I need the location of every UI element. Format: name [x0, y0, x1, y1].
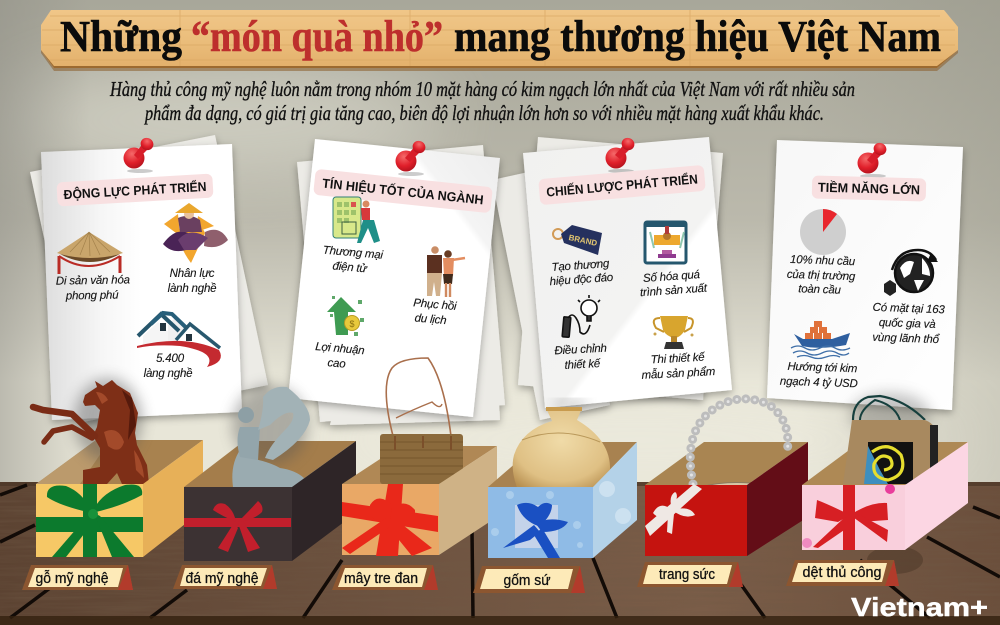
title banner	[41, 10, 958, 71]
text: thương mại điện tử: điện tử	[332, 260, 368, 275]
heading: CHIẾN LƯỢC PHÁT TRIỂN	[546, 171, 698, 200]
text: hướng tới kim ngạch: ngạch 4 tỷ USD	[780, 376, 858, 390]
bow: blue ribbon	[503, 503, 568, 558]
text: 5.400 làng nghề	[144, 353, 192, 380]
text: tạo thương hiệu độc đáo: Tạo thương	[551, 258, 610, 274]
text: lợi nhuận cao	[313, 341, 365, 372]
text: thi thiết kế mẫu sản phẩm	[640, 351, 716, 382]
text: có mặt tại 163	[871, 302, 946, 346]
text: điều chỉnh thiết kế: Điều chỉnh	[554, 343, 607, 357]
text: nhân lực lành nghề	[168, 268, 216, 295]
text: có mặt tại 163: quốc gia và	[879, 317, 936, 331]
text: thi thiết kế mẫu sản phẩm: mẫu sản phẩm	[641, 365, 716, 382]
icon: 3D printer	[645, 222, 686, 263]
label: trang sức: trang sức	[659, 566, 715, 583]
panel: động lực phát triển	[41, 136, 242, 420]
text: 10% nhu cầu: của thị trường	[787, 269, 856, 283]
text: có mặt tại 163: Có mặt tại 163	[872, 302, 946, 316]
text: phục hồi du lịch	[411, 297, 457, 328]
icon: couple travellers	[427, 246, 465, 297]
text: 5.400 làng nghề: 5.400	[156, 353, 185, 365]
heading	[812, 176, 926, 201]
icon: globe with arrow	[884, 250, 938, 296]
text: nhân lực lành nghề: Nhân lực	[170, 268, 215, 280]
icon: houses	[137, 313, 221, 367]
label: mây tre đan	[332, 565, 438, 590]
label: dệt thủ công	[786, 560, 899, 586]
label: gỗ mỹ nghệ	[22, 565, 133, 590]
bow: white ribbon	[645, 484, 702, 536]
text: 10% nhu cầu	[786, 254, 857, 297]
icon: e-commerce shopper	[333, 197, 380, 243]
label: dệt thủ công: dệt thủ công	[802, 564, 882, 581]
text: 10% nhu cầu: toàn cầu	[798, 283, 842, 297]
background: wall	[0, 0, 1000, 490]
title text: Những	[60, 12, 182, 61]
text: số hóa quá trình sản xuất	[639, 269, 708, 299]
label: trang sức	[637, 562, 743, 587]
back sheets of paper	[30, 135, 723, 425]
pearl bracelet	[690, 399, 788, 487]
text: tạo thương hiệu độc đáo: hiệu độc đáo	[549, 272, 614, 288]
heading: TIỀM NĂNG LỚN	[818, 180, 920, 197]
gift box: gốm sứ	[488, 401, 637, 558]
pie chart: 10%	[800, 209, 846, 255]
woven fabric bag	[843, 393, 938, 484]
icon: brand tag: BRAND	[568, 233, 598, 248]
bow: orange-red ribbon	[342, 484, 438, 556]
text: thương mại điện tử: Thương mại	[322, 245, 384, 262]
icon: profit arrow with coin	[327, 296, 364, 336]
text: tạo thương hiệu độc đáo	[548, 258, 614, 288]
panel: chiến lược phát triển	[523, 136, 732, 408]
ceramic vase	[513, 401, 610, 490]
title text	[60, 12, 941, 61]
text: có mặt tại 163: vùng lãnh thổ	[872, 332, 940, 346]
heading: ĐỘNG LỰC PHÁT TRIỂN	[63, 179, 207, 202]
text: lợi nhuận cao: cao	[327, 357, 347, 371]
label: mây tre đan: mây tre đan	[344, 570, 418, 587]
text: di sản văn hóa	[56, 274, 130, 303]
label: đá mỹ nghệ	[173, 565, 277, 589]
panel: tín hiệu tốt của ngành	[288, 139, 500, 417]
text: điều chỉnh thiết kế	[554, 343, 608, 372]
icon: brand tag	[553, 225, 602, 255]
bow: green ribbon	[36, 484, 143, 557]
icon: craftswoman with fans	[163, 203, 228, 263]
label: gốm sứ	[473, 566, 585, 593]
bow: red ribbon	[184, 501, 291, 552]
icon: red pin	[124, 136, 156, 173]
title text: “món quà nhỏ”	[191, 12, 443, 61]
text: nhân lực lành nghề: lành nghề	[168, 283, 216, 295]
text: phục hồi du lịch: du lịch	[414, 312, 447, 327]
icon: cargo ship	[791, 321, 850, 358]
icon: pencil and lightbulb	[562, 295, 600, 337]
label: đá mỹ nghệ: đá mỹ nghệ	[186, 570, 258, 587]
gift box: mây tre đan	[342, 358, 497, 556]
icon: red pin	[606, 136, 637, 173]
text: thương mại điện tử	[321, 245, 384, 277]
text: số hóa quá trình sản xuất: trình sản xuất	[640, 283, 708, 299]
intro paragraph	[109, 77, 855, 125]
woven handbag	[380, 358, 463, 484]
icon: red pin	[396, 139, 428, 176]
label: gỗ mỹ nghệ: gỗ mỹ nghệ	[36, 570, 108, 587]
bow: red ribbon	[813, 485, 888, 550]
icon: trophy	[654, 316, 694, 349]
gift box: gỗ mỹ nghệ	[33, 378, 203, 557]
gift box: dệt thủ công	[802, 393, 968, 550]
label: gốm sứ: gốm sứ	[504, 572, 550, 589]
text: di sản văn hóa: Di sản văn hóa	[56, 274, 130, 288]
text: phục hồi du lịch: Phục hồi	[413, 297, 457, 313]
icon: profit arrow with coin: $	[349, 319, 355, 329]
text: hướng tới kim ngạch	[780, 361, 858, 390]
text: 5.400 làng nghề: làng nghề	[144, 368, 192, 380]
text: số hóa quá trình sản xuất: Số hóa quá	[643, 269, 701, 285]
gift box: trang sức	[645, 399, 808, 556]
intro paragraph: phẩm đa dạng, có giá trị gia tăng cao, biên độ lợi nhuận lớn hơn so với nhiều mặt hàng xuất khẩu khác.	[143, 101, 824, 125]
background: wooden table	[0, 482, 1000, 625]
icon: red pin	[858, 141, 889, 178]
title text: mang thương hiệu Việt Nam	[454, 12, 941, 61]
icon: conical hat	[57, 232, 123, 274]
text: hướng tới kim ngạch: Hướng tới kim	[787, 361, 858, 375]
panel: tiềm năng lớn	[767, 140, 963, 410]
heading	[56, 174, 214, 206]
heading	[538, 165, 706, 205]
logo: Vietnam+: Vietnam+	[851, 592, 988, 622]
text: lợi nhuận cao: Lợi nhuận	[315, 341, 365, 357]
heading: TÍN HIỆU TỐT CỦA NGÀNH	[322, 176, 484, 207]
heading	[313, 169, 493, 213]
gift box: đá mỹ nghệ	[184, 385, 356, 561]
text: điều chỉnh thiết kế: thiết kế	[564, 358, 602, 372]
text: thi thiết kế mẫu sản phẩm: Thi thiết kế	[650, 352, 707, 366]
text: di sản văn hóa: phong phú	[65, 290, 119, 302]
stone sculpture	[232, 385, 310, 487]
text: 10% nhu cầu: 10% nhu cầu	[790, 254, 856, 268]
horse sculpture	[33, 378, 149, 484]
